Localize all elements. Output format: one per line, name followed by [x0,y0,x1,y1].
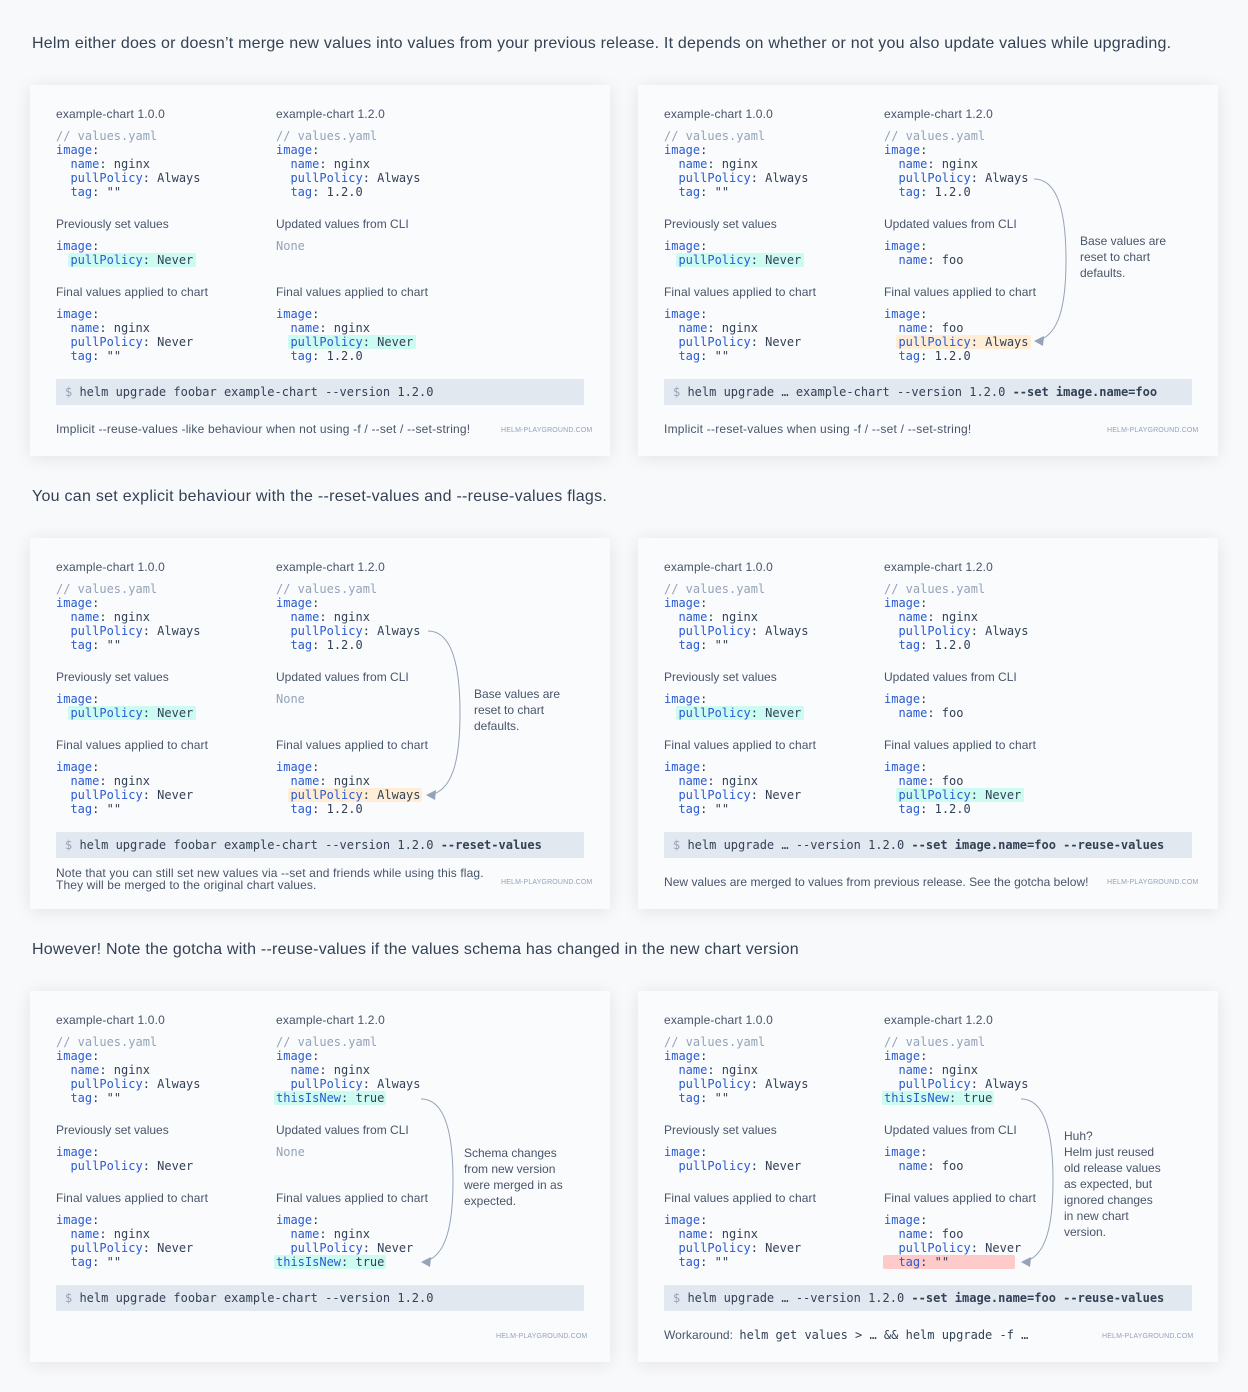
annotation [1064,1128,1161,1240]
annotation [1080,234,1166,280]
annotation: Schema changes [464,1146,557,1160]
new chart heading: example-chart 1.2.0 [276,560,385,574]
previously set label: Previously set values [56,217,169,231]
new values yaml: // values.yaml image: name: nginx pullPolicy: Always tag: 1.2.0 [276,582,420,652]
heading: explicit flags: You can set explicit behaviour with the --reset-values and --reuse-values flags. [32,488,607,505]
final label right: Final values applied to chart [884,1191,1036,1205]
previously set label: Previously set values [664,670,777,684]
command bar: $ helm upgrade foobar example-chart --version 1.2.0 --reset-values [65,838,542,852]
arrow: base to final [426,630,460,800]
panel: implicit reset [638,85,1218,456]
previously set label: Previously set values [56,1123,169,1137]
new values yaml: // values.yaml image: name: nginx pullPolicy: Always tag: 1.2.0 [276,129,420,199]
new values yaml: thisIsNew: true [884,1091,992,1105]
final values right: tag: "" [898,1255,949,1269]
final values right: image: name: nginx tag: 1.2.0 [276,307,370,363]
annotation: reset to chart [474,703,544,717]
final label right: Final values applied to chart [884,738,1036,752]
final values left: image: name: nginx pullPolicy: Never tag: "" [56,307,193,363]
panel: schema merged [30,991,610,1362]
old chart heading: example-chart 1.0.0 [664,1013,773,1027]
old values yaml: // values.yaml image: name: nginx pullPolicy: Always tag: "" [56,129,200,199]
previously set values [56,239,196,267]
new chart heading: example-chart 1.2.0 [884,1013,993,1027]
old chart heading: example-chart 1.0.0 [664,107,773,121]
annotation: old release values [1064,1161,1161,1175]
updated values: image: name: foo [884,239,963,267]
updated values none: None [276,1145,305,1159]
final values left: image: name: nginx pullPolicy: Never tag: "" [664,1213,801,1269]
new chart heading: example-chart 1.2.0 [276,1013,385,1027]
new values yaml: // values.yaml image: name: nginx pullPolicy: Always tag: 1.2.0 [884,129,1028,199]
updated values label: Updated values from CLI [276,1123,409,1137]
watermark: HELM-PLAYGROUND.COM [1102,1333,1193,1340]
annotation: from new version [464,1162,555,1176]
command bar [664,379,1192,405]
previously set values: image: [664,239,707,253]
command bar: $ helm upgrade … example-chart --version 1.2.0 --set image.name=foo [673,385,1157,399]
command bar: $ helm upgrade … --version 1.2.0 --set image.name=foo --reuse-values [673,838,1164,852]
updated values label: Updated values from CLI [884,217,1017,231]
annotation: defaults. [474,719,519,733]
final label left: Final values applied to chart [664,285,816,299]
final label left: Final values applied to chart [56,1191,208,1205]
final label right: Final values applied to chart [884,285,1036,299]
watermark: HELM-PLAYGROUND.COM [1107,427,1198,434]
previously set label: Previously set values [56,670,169,684]
footer note [56,866,484,892]
previously set values: image: pullPolicy: Never [664,1145,801,1173]
previously set values: image: pullPolicy: Never [56,1145,193,1173]
updated values none: None [276,239,305,253]
footer note: They will be merged to the original chart values. [56,878,316,892]
updated values label: Updated values from CLI [276,217,409,231]
annotation: Huh? [1064,1129,1093,1143]
footer note: Implicit --reset-values when using -f / --set / --set-string! [664,422,971,436]
old chart heading: example-chart 1.0.0 [664,560,773,574]
panel: implicit reuse [30,85,610,456]
previously set values [56,692,196,720]
final label left: Final values applied to chart [664,738,816,752]
watermark: HELM-PLAYGROUND.COM [1107,879,1198,886]
updated values: image: name: foo [884,1145,963,1173]
annotation: expected. [464,1194,516,1208]
annotation: in new chart [1064,1209,1129,1223]
final values left: image: name: nginx pullPolicy: Never tag: "" [56,760,193,816]
heading: gotcha: However! Note the gotcha with --reuse-values if the values schema has changed in the new chart version [32,941,799,958]
footer note: Implicit --reuse-values -like behaviour when not using -f / --set / --set-string! [56,422,470,436]
previously set values: image: [664,692,707,706]
final values left: image: name: nginx pullPolicy: Never tag: "" [664,760,801,816]
final values right: thisIsNew: true [276,1255,384,1269]
heading: intro: Helm either does or doesn’t merge new values into values from your previous release. It depends on whether or not you also update values while upgrading. [32,35,1171,52]
previously set values: pullPolicy: Never [70,253,193,267]
panel: reuse-values [638,538,1218,909]
updated values: image: name: foo [884,692,963,720]
arrow: new key merged [421,1098,454,1267]
old chart heading: example-chart 1.0.0 [56,560,165,574]
updated values label: Updated values from CLI [884,1123,1017,1137]
previously set values: pullPolicy: Never [678,706,801,720]
final label right: Final values applied to chart [276,738,428,752]
footer note: Note that you can still set new values via --set and friends while using this flag. [56,866,484,880]
final values right: image: name: nginx tag: 1.2.0 [276,760,370,816]
final values right: image: name: foo pullPolicy: Never [884,1213,1021,1255]
command bar: $ helm upgrade foobar example-chart --version 1.2.0 [65,385,433,399]
final values right: pullPolicy: Always [290,788,420,802]
command bar [56,832,584,858]
new values yaml: thisIsNew: true [276,1091,384,1105]
final values right [276,760,422,816]
command bar: $ helm upgrade foobar example-chart --version 1.2.0 [65,1291,433,1305]
annotation [464,1146,563,1208]
command bar: $ helm upgrade … --version 1.2.0 --set image.name=foo --reuse-values [673,1291,1164,1305]
final values right: pullPolicy: Never [290,335,413,349]
final values right: image: name: nginx pullPolicy: Never [276,1213,413,1255]
annotation: were merged in as [464,1178,563,1192]
final values right: image: name: foo tag: 1.2.0 [884,760,971,816]
annotation [474,687,560,733]
updated values none: None [276,692,305,706]
annotation: ignored changes [1064,1193,1153,1207]
annotation: Base values are [1080,234,1166,248]
previously set values: pullPolicy: Never [70,706,193,720]
panel: gotcha [638,991,1218,1362]
previously set label: Previously set values [664,217,777,231]
annotation: as expected, but [1064,1177,1152,1191]
watermark: HELM-PLAYGROUND.COM [501,427,592,434]
new values yaml: // values.yaml image: name: nginx pullPolicy: Always [884,1035,1028,1091]
previously set values: image: [56,692,99,706]
final values right [884,307,1031,363]
annotation: Base values are [474,687,560,701]
old chart heading: example-chart 1.0.0 [56,1013,165,1027]
command bar [664,832,1192,858]
final label right: Final values applied to chart [276,285,428,299]
arrow: ignored changes [1015,1093,1075,1273]
new chart heading: example-chart 1.2.0 [884,560,993,574]
previously set values [664,692,804,720]
final values left: image: name: nginx pullPolicy: Never tag: "" [664,307,801,363]
previously set values [664,239,804,267]
arrow: base to final [1034,178,1066,346]
old values yaml: // values.yaml image: name: nginx pullPolicy: Always tag: "" [56,1035,200,1105]
final label left: Final values applied to chart [664,1191,816,1205]
old values yaml: // values.yaml image: name: nginx pullPolicy: Always tag: "" [664,1035,808,1105]
final label left: Final values applied to chart [56,738,208,752]
old values yaml: // values.yaml image: name: nginx pullPolicy: Always tag: "" [56,582,200,652]
panel: reset-values [30,538,610,909]
old chart heading: example-chart 1.0.0 [56,107,165,121]
updated values label: Updated values from CLI [276,670,409,684]
new chart heading: example-chart 1.2.0 [884,107,993,121]
final values right: pullPolicy: Never [898,788,1021,802]
updated values label: Updated values from CLI [884,670,1017,684]
annotation: version. [1064,1225,1106,1239]
annotation: defaults. [1080,266,1125,280]
annotation: Helm just reused [1064,1145,1154,1159]
new values yaml: // values.yaml image: name: nginx pullPolicy: Always [276,1035,420,1091]
old values yaml: // values.yaml image: name: nginx pullPolicy: Always tag: "" [664,582,808,652]
command bar [56,1285,584,1311]
command bar [56,379,584,405]
final values right: pullPolicy: Always [898,335,1028,349]
final label right: Final values applied to chart [276,1191,428,1205]
footer note: New values are merged to values from previous release. See the gotcha below! [664,875,1089,889]
final values right: image: name: foo tag: 1.2.0 [884,307,971,363]
command bar [664,1285,1192,1311]
previously set values: image: [56,239,99,253]
annotation: reset to chart [1080,250,1150,264]
final values right [884,760,1024,816]
final label left: Final values applied to chart [56,285,208,299]
final values left: image: name: nginx pullPolicy: Never tag: "" [56,1213,193,1269]
footer note: Workaround: helm get values > … && helm upgrade -f … [664,1328,1028,1342]
final values right [276,307,416,363]
previously set label: Previously set values [664,1123,777,1137]
new values yaml: // values.yaml image: name: nginx pullPolicy: Always tag: 1.2.0 [884,582,1028,652]
previously set values: pullPolicy: Never [678,253,801,267]
old values yaml: // values.yaml image: name: nginx pullPolicy: Always tag: "" [664,129,808,199]
new chart heading: example-chart 1.2.0 [276,107,385,121]
watermark: HELM-PLAYGROUND.COM [496,1333,587,1340]
watermark: HELM-PLAYGROUND.COM [501,879,592,886]
